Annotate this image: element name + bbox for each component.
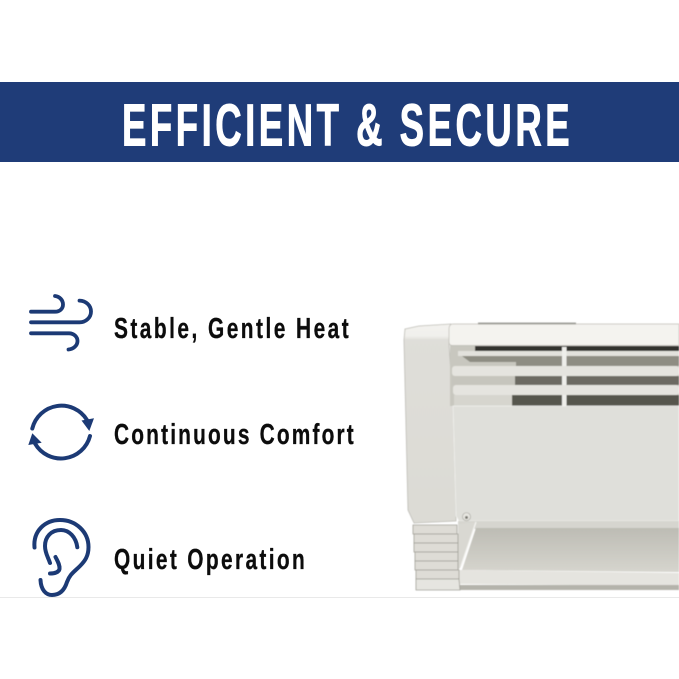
label: Stable, Gentle Heat	[114, 313, 349, 345]
label: Continuous Comfort	[114, 419, 354, 451]
heater lower trough	[458, 521, 679, 590]
feature: continuous comfort	[28, 406, 354, 458]
banner	[0, 82, 679, 162]
baseboard heater product image	[0, 322, 679, 598]
icon: cycle arrows	[28, 406, 94, 458]
feature: quiet operation	[34, 520, 305, 595]
title: EFFICIENT & SECURE	[122, 94, 570, 159]
heater louvered foot	[413, 525, 460, 590]
heater end cap	[404, 324, 456, 523]
icon: wind	[31, 296, 91, 350]
heater top lid	[449, 324, 679, 346]
label: Quiet Operation	[114, 544, 305, 576]
feature: stable, gentle heat	[31, 296, 349, 350]
panel screw	[462, 513, 470, 521]
heater air vents	[450, 345, 679, 406]
heater front panel	[453, 406, 679, 521]
icon: ear	[34, 520, 88, 595]
